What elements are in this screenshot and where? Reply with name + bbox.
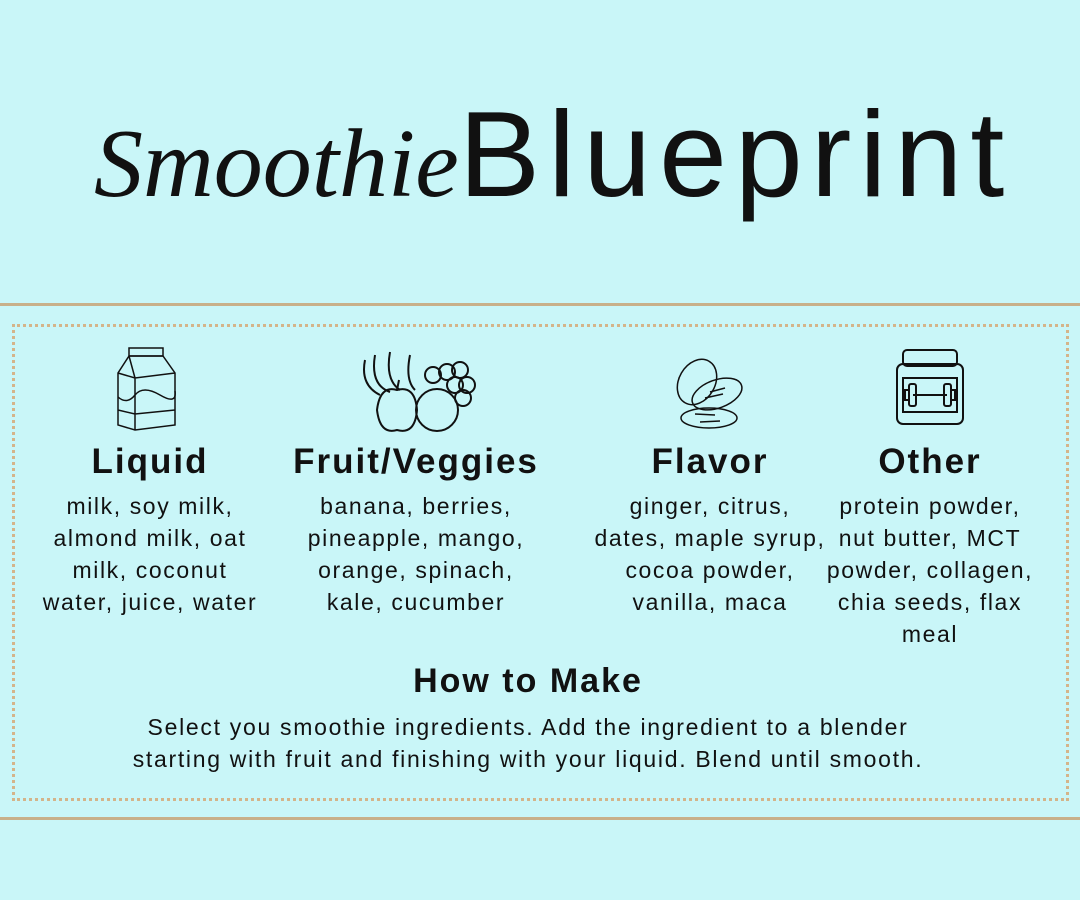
column: other: chia seeds, flax bbox=[838, 589, 1022, 615]
column: flavor bbox=[594, 442, 826, 615]
column: liquid: Liquid bbox=[92, 442, 208, 481]
column: liquid: water, juice, water bbox=[43, 589, 257, 615]
column: flavor: cocoa powder, bbox=[625, 557, 795, 583]
column: liquid: milk, coconut bbox=[72, 557, 228, 583]
icon: milk carton bbox=[117, 347, 176, 431]
column: fruit/veggies: kale, cucumber bbox=[327, 589, 505, 615]
text: instructions: Select you smoothie ingredients. Add the ingredient to a blender bbox=[148, 714, 908, 740]
column: flavor: dates, maple syrup, bbox=[594, 525, 826, 551]
column: flavor: ginger, citrus, bbox=[630, 493, 790, 519]
column: liquid: milk, soy milk, bbox=[66, 493, 234, 519]
icon: protein jar bbox=[896, 349, 964, 425]
column: other: meal bbox=[902, 621, 958, 647]
column: other: powder, collagen, bbox=[827, 557, 1033, 583]
column: other: protein powder, bbox=[839, 493, 1021, 519]
column: other: Other bbox=[878, 442, 982, 481]
icon: fruits bbox=[363, 352, 476, 432]
column: fruit/veggies: orange, spinach, bbox=[318, 557, 514, 583]
panel: ingredients box bbox=[12, 324, 1069, 801]
text: instructions bbox=[133, 714, 923, 772]
title: SmoothieBlueprint bbox=[94, 86, 1012, 222]
column: fruit/veggies: Fruit/Veggies bbox=[293, 442, 539, 481]
icon: dates bbox=[676, 358, 743, 429]
text: instructions: starting with fruit and finishing with your liquid. Blend until smooth. bbox=[133, 746, 923, 772]
column: other bbox=[827, 442, 1033, 647]
column: fruit/veggies: banana, berries, bbox=[320, 493, 512, 519]
column: other: nut butter, MCT bbox=[839, 525, 1021, 551]
column: fruit/veggies bbox=[293, 442, 539, 615]
column: liquid bbox=[42, 442, 257, 615]
column: liquid: almond milk, oat bbox=[53, 525, 247, 551]
heading: how to make: How to Make bbox=[413, 662, 643, 700]
column: fruit/veggies: pineapple, mango, bbox=[308, 525, 524, 551]
column: flavor: Flavor bbox=[651, 442, 769, 481]
column: flavor: vanilla, maca bbox=[632, 589, 788, 615]
